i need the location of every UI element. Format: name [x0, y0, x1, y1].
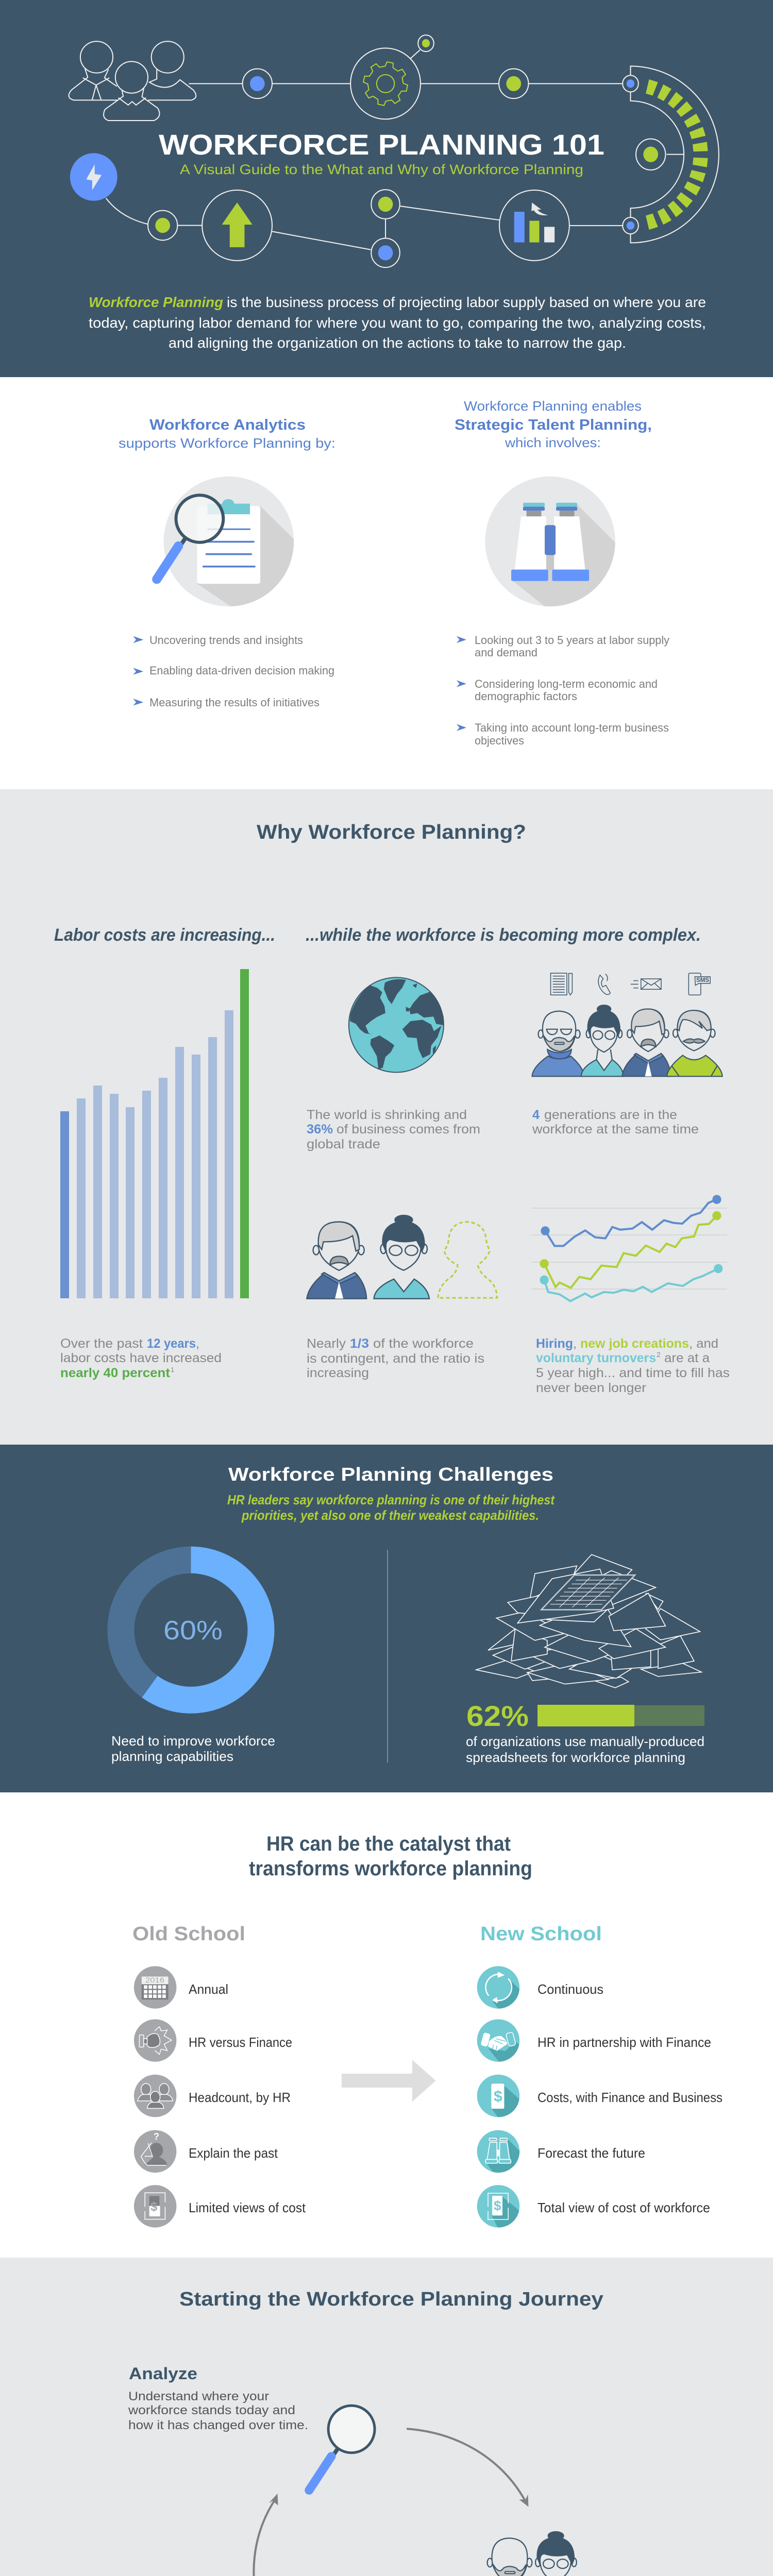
dollar glyphs on new school icons: $: [494, 2088, 502, 2105]
subtitle: A Visual Guide to the What and Why of Workforce Planning: [180, 162, 583, 177]
text: labor cost stat: ,: [196, 1336, 199, 1351]
text: old school list: Limited views of cost: [189, 2200, 306, 2215]
bullet list: workforce analytics: [133, 634, 334, 709]
icon: handshake: [477, 2019, 519, 2062]
icons: generations of communication devices: [551, 973, 710, 995]
icon: gear in circle: [350, 48, 421, 119]
stat: 62 percent bar: [466, 1700, 704, 1732]
arrow: old to new: [342, 2060, 436, 2102]
label: SMS: SMS: [696, 976, 709, 984]
text: hiring stat: 2: [657, 1350, 661, 1359]
text: labor cost stat: Over the past: [60, 1336, 143, 1351]
title: WORKFORCE PLANNING 101: [159, 128, 604, 161]
text: hiring stat: , and: [689, 1336, 718, 1351]
text: new school list: [537, 1981, 722, 2215]
heading: journey: Starting the Workforce Planning Journey: [179, 2289, 603, 2310]
text: labor cost stat: 12 years: [147, 1336, 196, 1351]
text: contingent stat: is contingent, and the ratio is: [307, 1351, 484, 1366]
text: labor cost stat: labor costs have increased: [60, 1351, 222, 1365]
person: woman with glasses: [581, 1005, 624, 1076]
calendar and cost icon text: 2016: [145, 1976, 164, 1984]
heading: HR catalyst: HR can be the catalyst that: [266, 1833, 511, 1855]
subheading: challenges: [227, 1492, 555, 1523]
line chart: hiring, job creation, turnover: [531, 1195, 727, 1301]
text: old school list: Explain the past: [189, 2145, 278, 2161]
intro paragraph: [89, 294, 706, 351]
calendar and cost icon text: [145, 1976, 164, 2214]
node: green right: [636, 139, 684, 170]
text: old school list: [189, 1981, 306, 2215]
person: man with tie: [622, 1009, 670, 1076]
icon: lightning bolt circle: [70, 153, 117, 201]
text: hiring stat: [536, 1336, 730, 1395]
bullet list: strategic talent planning: and demand: [475, 646, 537, 659]
node: green dot: [499, 69, 528, 98]
text: capabilities caption: planning capabilities: [111, 1749, 233, 1764]
icon: headcount: [134, 2075, 176, 2117]
text: analyze: how it has changed over time.: [128, 2418, 308, 2432]
node: green middle: [371, 190, 400, 219]
icon: calendar: [134, 1966, 176, 2009]
text: labor cost stat: [60, 1336, 222, 1380]
text: analyze: Analyze: [129, 2364, 197, 2383]
text: global trade stat: [307, 1108, 480, 1151]
subheading: challenges: priorities, yet also one of their weakest capabilities.: [241, 1507, 539, 1523]
text: hiring stat: are at a: [664, 1351, 710, 1365]
subheading: workforce complexity: ...while the workforce is becoming more complex.: [306, 925, 701, 945]
bullet list: workforce analytics: Enabling data-driven decision making: [149, 664, 334, 677]
header illustration: connected network: [69, 35, 719, 267]
text: old school list: HR versus Finance: [189, 2035, 292, 2050]
person: bald bearded man: [532, 1011, 584, 1076]
heading: HR catalyst: [249, 1833, 532, 1880]
text: spreadsheet caption: spreadsheets for workforce planning: [466, 1750, 685, 1765]
text: contingent stat: increasing: [307, 1366, 369, 1380]
text: contingent stat: Nearly: [307, 1336, 346, 1351]
icon: head scratching: [134, 2130, 176, 2173]
text: contingent stat: 1/3: [350, 1336, 369, 1351]
stat: 62 percent bar: 62%: [466, 1700, 529, 1732]
heading: strategic talent planning: [455, 398, 652, 450]
bullet list: strategic talent planning: objectives: [475, 734, 524, 747]
heading: strategic talent planning: Workforce Planning enables: [464, 398, 642, 414]
node: green lower left: [148, 211, 177, 240]
icon: contingent workforce people: [307, 1215, 497, 1299]
text: labor cost stat: 1: [171, 1366, 174, 1374]
text: generations stat: generations are in the: [544, 1108, 677, 1122]
bar chart: labor costs: [60, 969, 249, 1298]
text: hiring stat: voluntary turnovers: [536, 1351, 656, 1365]
gauge ticks: [645, 79, 708, 230]
heading: new school: New School: [480, 1923, 602, 1945]
arrow: act to analyze: [254, 2494, 278, 2576]
text: contingent stat: [307, 1336, 484, 1380]
text: generations stat: [532, 1108, 699, 1137]
intro paragraph: is the business process of projecting labor supply based on where you are: [227, 294, 706, 310]
dollar glyphs on new school icons: [494, 2088, 502, 2213]
text: new school list: Continuous: [537, 1981, 603, 1997]
intro paragraph: today, capturing labor demand for where you want to go, comparing the two, analyzing costs,: [89, 315, 706, 331]
heading: why workforce planning: Why Workforce Planning?: [257, 821, 526, 843]
text: hiring stat: ,: [573, 1336, 577, 1351]
person: man: [307, 1222, 366, 1299]
text: spreadsheet caption: [466, 1734, 704, 1765]
calendar and cost icon text: ?: [154, 2131, 159, 2142]
connector lines bottom row: [106, 198, 623, 250]
divider: [387, 1550, 388, 1762]
bullet list: strategic talent planning: Taking into account long-term business: [475, 721, 669, 734]
heading: old school: Old School: [132, 1923, 245, 1945]
calendar and cost icon text: $: [150, 2200, 158, 2214]
heading: workforce analytics: [119, 417, 335, 451]
old school icons: [134, 1966, 176, 2228]
text: new school list: Total view of cost of workforce: [537, 2200, 710, 2215]
text: hiring stat: Hiring: [536, 1336, 573, 1351]
text: global trade stat: 36%: [307, 1122, 333, 1137]
text: capabilities caption: [111, 1733, 275, 1764]
subheading: labor costs: Labor costs are increasing...: [54, 925, 275, 945]
person: man with moustache: [667, 1010, 722, 1076]
text: spreadsheet caption: of organizations use manually-produced: [466, 1734, 704, 1749]
person: woman: [374, 1215, 429, 1299]
text: new school list: Forecast the future: [537, 2145, 645, 2161]
text: old school list: Headcount, by HR: [189, 2090, 291, 2105]
icon: continuous arrows: [477, 1966, 519, 2009]
node: small green top: [418, 35, 434, 52]
node: small blue top of arc: [623, 75, 638, 92]
heading: HR catalyst: transforms workforce planning: [249, 1857, 532, 1880]
person: woman: [530, 2532, 578, 2576]
icon: three people outline: [69, 41, 196, 121]
text: hiring stat: 5 year high... and time to fill has: [536, 1366, 730, 1380]
heading: strategic talent planning: which involves:: [505, 435, 601, 450]
bullet list: workforce analytics: Measuring the results of initiatives: [149, 696, 320, 709]
text: contingent stat: of the workforce: [373, 1336, 474, 1351]
text: generations stat: workforce at the same time: [532, 1122, 699, 1137]
node: small blue bottom of arc: [623, 217, 638, 234]
text: hiring stat: new job creations: [580, 1336, 689, 1351]
icon: green arrow in circle: [202, 190, 272, 261]
bullet list: strategic talent planning: [457, 634, 669, 747]
spreadsheet on top: [541, 1575, 635, 1610]
new school icons: [477, 1966, 523, 2233]
donut chart: 60 percent: 60%: [163, 1616, 223, 1646]
donut chart: 60 percent: [107, 1547, 274, 1714]
person: dashed placeholder: [438, 1222, 497, 1298]
icon: magnifier: [309, 2405, 375, 2490]
arrow: analyze to align: [407, 2429, 528, 2507]
icon: right arc gauge: [630, 66, 719, 243]
heading: workforce analytics: Workforce Analytics: [149, 417, 306, 433]
icon: four generations of people: [532, 1005, 722, 1076]
node: blue middle: [371, 238, 400, 267]
subheading: challenges: HR leaders say workforce planning is one of their highest: [227, 1492, 555, 1507]
text: generations stat: 4: [532, 1108, 540, 1122]
icon: binoculars small: [477, 2130, 519, 2173]
dollar glyphs on new school icons: $: [494, 2198, 501, 2213]
text: new school list: HR in partnership with Finance: [537, 2035, 711, 2050]
bullet list: workforce analytics: Uncovering trends and insights: [149, 634, 303, 647]
icon: binoculars: [485, 476, 615, 607]
icon: boxing glove: [134, 2019, 176, 2062]
icon: clipboard and magnifier: [152, 476, 294, 606]
bullet list: strategic talent planning: demographic factors: [475, 690, 577, 703]
text: old school list: Annual: [189, 1981, 228, 1997]
text: global trade stat: global trade: [307, 1137, 380, 1151]
connector lines top row: [189, 50, 623, 83]
person: bearded man: [481, 2538, 536, 2576]
icon: two people align: [481, 2532, 578, 2576]
icon: chart in circle: [499, 190, 569, 261]
intro paragraph: Workforce Planning: [89, 294, 223, 310]
text: global trade stat: The world is shrinking and: [307, 1108, 467, 1122]
heading: strategic talent planning: Strategic Talent Planning,: [455, 417, 652, 433]
node: blue dot: [243, 69, 272, 98]
bullet list: strategic talent planning: Considering long-term economic and: [475, 677, 658, 690]
intro paragraph: and aligning the organization on the actions to take to narrow the gap.: [169, 335, 626, 351]
text: labor cost stat: nearly 40 percent: [60, 1366, 171, 1380]
icon: limited cost view: [134, 2185, 176, 2228]
text: analyze: workforce stands today and: [128, 2403, 295, 2417]
text: new school list: Costs, with Finance and Business: [537, 2090, 722, 2105]
text: hiring stat: never been longer: [536, 1381, 646, 1395]
text: analyze: Understand where your: [128, 2389, 269, 2403]
text: analyze: [128, 2364, 308, 2432]
text: global trade stat: of business comes from: [337, 1122, 480, 1137]
text: capabilities caption: Need to improve workforce: [111, 1733, 275, 1749]
icon: total cost: [477, 2185, 519, 2228]
bullet list: strategic talent planning: Looking out 3 to 5 years at labor supply: [475, 634, 669, 647]
icon: pile of paper spreadsheets: [476, 1554, 701, 1688]
heading: workforce analytics: supports Workforce Planning by:: [119, 435, 335, 451]
icon: money card: [477, 2074, 519, 2117]
heading: challenges: Workforce Planning Challenges: [228, 1464, 553, 1485]
icon: globe: [349, 977, 444, 1072]
